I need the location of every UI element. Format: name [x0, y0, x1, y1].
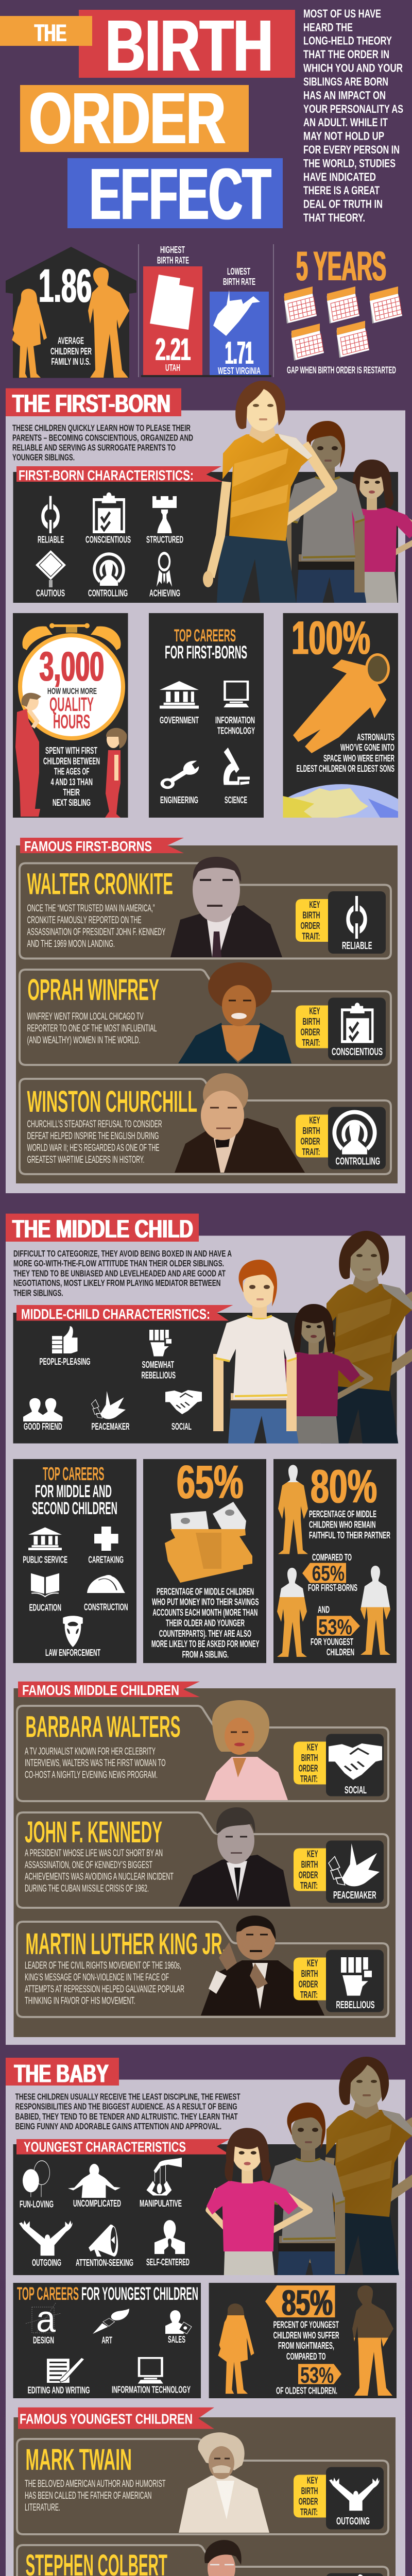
icon: government	[160, 681, 199, 725]
trait: rebellious: REBELLIOUS	[336, 1999, 375, 2011]
panel: middle-child characteristics	[13, 1305, 397, 1444]
icon: design: DESIGN	[33, 2335, 54, 2345]
panel: first-born characteristics	[13, 466, 398, 603]
stat: savings: ACCOUNTS EACH MONTH (MORE THAN	[152, 1607, 258, 1618]
icon: information technology: TECHNOLOGY	[217, 726, 255, 736]
icon: uncomplicated	[68, 2164, 121, 2209]
card: Winston Churchill: WORLD WAR II; HE’S REGARDED AS ONE OF THE	[27, 1143, 160, 1154]
trait: rebellious: ORDER	[299, 1979, 318, 1990]
icon: sales: SALES	[168, 2334, 185, 2345]
card: Oprah Winfrey: REPORTER TO ONE OF THE MOST INFLUENTIAL	[27, 1023, 157, 1034]
ribbon: famous middle children: FAMOUS MIDDLE CHILDREN	[22, 1682, 179, 1698]
card: Martin Luther King Jr.: THINKING IN FAVOR OF HIS MOVEMENT.	[25, 1996, 135, 2007]
stat: savings: MORE LIKELY TO BE ASKED FOR MONEY	[151, 1639, 260, 1649]
icon: manipulative	[140, 2158, 182, 2209]
card: Walter Cronkite: CRONKITE FAMOUSLY REPORTED ON THE	[27, 915, 141, 926]
trait: reliable: RELIABLE	[342, 940, 372, 952]
intro text: DEAL OF TRUTH IN	[303, 198, 383, 210]
trait: reliable	[296, 891, 386, 954]
trait: outgoing	[294, 2467, 384, 2530]
stat: savings: THEIR OLDER AND YOUNGER	[166, 1618, 245, 1628]
icon: sales	[165, 2310, 192, 2345]
trait: social	[294, 1734, 384, 1796]
trait: controlling: KEY	[309, 1115, 320, 1125]
icon: people-pleasing: PEOPLE-PLEASING	[39, 1357, 91, 1367]
illustration: three siblings	[215, 1231, 412, 1453]
title: The Birth Order Effect: ORDER	[29, 77, 226, 159]
text block: first-born description: YOUNGER SIBLINGS.	[12, 452, 75, 463]
stat: savings	[143, 1456, 266, 1663]
stat: quality hours: CHILDREN BETWEEN	[43, 756, 100, 767]
icon: construction: CONSTRUCTION	[84, 1602, 128, 1613]
icon: information technology: INFORMATION TECHNOLOGY	[112, 2385, 191, 2395]
panel: the first-born	[6, 381, 412, 1193]
icon: science	[224, 748, 250, 805]
badge: 53%: 53%	[318, 1615, 352, 1639]
icon: information technology	[215, 681, 255, 736]
icon: outgoing: OUTGOING	[32, 2258, 61, 2268]
stat: nightmares: COMPARED TO	[286, 2351, 326, 2362]
icon: somewhat rebellious: REBELLIOUS	[141, 1370, 176, 1381]
panel: top careers for youngest children	[13, 2283, 201, 2398]
icon: money stacks	[165, 1502, 252, 1583]
card: Martin Luther King Jr.: ATTEMPTS AT REPRESSION HELPED GALVANIZE POPULAR	[25, 1984, 184, 1995]
card: Winston Churchill	[20, 1073, 391, 1174]
trait: social: TRAIT:	[300, 1774, 318, 1784]
card: Mark Twain: LITERATURE.	[25, 2502, 60, 2513]
ribbon: youngest characteristics: YOUNGEST CHARACTERISTICS	[24, 2139, 186, 2155]
icon: manipulative: MANIPULATIVE	[140, 2198, 182, 2209]
stat: nightmares	[209, 2282, 397, 2398]
card: Martin Luther King Jr.	[17, 1916, 388, 2017]
card: Mark Twain: HAS BEEN CALLED THE FATHER OF AMERICAN	[25, 2490, 151, 2501]
icon: somewhat rebellious: SOMEWHAT	[142, 1360, 174, 1370]
text block: baby description	[15, 2091, 241, 2131]
card: Walter Cronkite: AND THE 1969 MOON LANDING.	[27, 939, 115, 950]
icon: achieving: ACHIEVING	[149, 588, 180, 598]
card: Barbara Walters	[17, 1700, 388, 1801]
stat: highest birth rate Utah: UTAH	[165, 363, 180, 373]
trait: reliable: TRAIT:	[302, 931, 320, 942]
panel: famous youngest children	[13, 2408, 396, 2576]
panel: the baby: FOR YOUNGEST CHILDREN	[81, 2284, 198, 2304]
stat: faithfulness: CHILDREN	[327, 1647, 354, 1657]
intro text: HAVE INDICATED	[303, 171, 376, 183]
icon: alarm clock	[20, 623, 123, 738]
icon: social	[165, 1390, 202, 1432]
stat: faithfulness: COMPARED TO	[312, 1552, 352, 1563]
portrait: Walter Cronkite	[170, 857, 282, 957]
icon: astronaut	[293, 653, 390, 753]
icon: construction	[84, 1575, 128, 1613]
card: John F. Kennedy: A PRESIDENT WHOSE LIFE WAS CUT SHORT BY AN	[25, 1848, 163, 1859]
panel: top careers for middle and second children: SECOND CHILDREN	[32, 1499, 117, 1518]
icon: fun-loving: FUN-LOVING	[20, 2199, 54, 2209]
stat: quality hours: HOW MUCH MORE	[47, 686, 97, 696]
stat: lowest birth rate West Virginia	[141, 266, 271, 377]
stat: astronauts	[283, 613, 398, 818]
stat: quality hours: NEXT SIBLING	[53, 798, 91, 808]
icon: information technology: INFORMATION	[215, 715, 255, 725]
icon: people-pleasing	[39, 1326, 91, 1367]
trait: social: ORDER	[299, 1763, 318, 1773]
card: Stephen Colbert	[17, 2540, 388, 2576]
panel: the baby	[6, 2057, 412, 2576]
figure: parent	[15, 693, 41, 817]
icon: cautious: CAUTIOUS	[36, 588, 65, 598]
ribbon: first-born characteristics: FIRST-BORN CHARACTERISTICS:	[19, 467, 194, 483]
card: Walter Cronkite: ASSASSINATION OF PRESIDENT JOHN F. KENNEDY	[27, 927, 166, 938]
title: The Birth Order Effect: BIRTH	[106, 5, 273, 86]
icon: fun-loving	[20, 2161, 54, 2209]
text block: first-born description: RELIABLE AND SERVING AS SURROGATE PARENTS TO	[12, 443, 176, 453]
icon: government: GOVERNMENT	[160, 715, 199, 725]
stat: quality hours: THE AGES OF	[54, 767, 90, 777]
stat: lowest birth rate West Virginia: BIRTH RATE	[223, 277, 255, 287]
panel: top careers for first-borns: TOP CAREERS	[174, 626, 236, 646]
icon: engineering: ENGINEERING	[160, 795, 198, 805]
portrait: Oprah Winfrey	[178, 962, 291, 1063]
intro text: THERE IS A GREAT	[303, 184, 380, 197]
icon: structured: STRUCTURED	[146, 535, 183, 545]
stat: quality hours: SPENT WITH FIRST	[45, 745, 97, 756]
panel: top careers for first-borns	[149, 613, 264, 818]
trait: reliable: ORDER	[301, 921, 320, 931]
text block: middle child description: NEGOTIATIONS, MOST LIKELY FROM PLAYING MEDIATOR BETWEEN	[13, 1278, 220, 1288]
stat: average children per family: FAMILY IN U.S.	[52, 357, 91, 367]
stat: quality hours: HOURS	[53, 711, 90, 733]
stat: lowest birth rate West Virginia: WEST VIRGINIA	[218, 366, 261, 376]
icon: uncomplicated: UNCOMPLICATED	[73, 2198, 121, 2209]
card: Mark Twain: MARK TWAIN	[26, 2443, 132, 2477]
intro text: HAS AN IMPACT ON	[303, 89, 386, 101]
trait: rebellious: TRAIT:	[300, 1990, 318, 2000]
heading: the first-born: THE FIRST-BORN	[12, 390, 170, 418]
portrait: Stephen Colbert	[176, 2540, 265, 2576]
card: Mark Twain	[17, 2432, 388, 2534]
ribbon: middle-child characteristics: MIDDLE-CHILD CHARACTERISTICS:	[21, 1306, 210, 1322]
panel: top careers for youngest children: TOP CAREERS	[17, 2284, 79, 2304]
icon: good friend: GOOD FRIEND	[24, 1421, 62, 1432]
title: The Birth Order Effect: EFFECT	[90, 153, 271, 234]
intro text: MOST OF US HAVE	[303, 7, 381, 20]
card: Winston Churchill: DEFEAT HELPED INSPIRE THE ENGLISH DURING	[27, 1131, 159, 1142]
icon: peacemaker: PEACEMAKER	[92, 1421, 130, 1432]
text block: baby description: BABIED, THEY TEND TO BE TENDER AND ALTRUISTIC. THEY LEARN THAT	[15, 2111, 238, 2122]
card: Martin Luther King Jr.: MARTIN LUTHER KING JR.	[26, 1927, 227, 1961]
icon: controlling	[88, 554, 128, 598]
card: Winston Churchill: CHURCHILL’S STEADFAST REFUSAL TO CONSIDER	[27, 1119, 162, 1130]
icon: law enforcement	[45, 1616, 100, 1658]
icon: conscientious	[85, 493, 131, 545]
illustration: earth	[283, 784, 398, 818]
card: Martin Luther King Jr.: KING’S MESSAGE OF NON-VIOLENCE IN THE FACE OF	[25, 1972, 169, 1983]
intro text: HEARD THE	[303, 21, 353, 33]
panel: top careers for first-borns: FOR FIRST-BORNS	[165, 642, 247, 663]
trait: controlling: TRAIT:	[302, 1147, 320, 1157]
text block: baby description: THESE CHILDREN USUALLY RECEIVE THE LEAST DISCIPLINE, THE FEWEST	[15, 2091, 241, 2102]
card: Walter Cronkite: WALTER CRONKITE	[27, 867, 173, 901]
stat: savings: WHO PUT MONEY INTO THEIR SAVINGS	[152, 1597, 259, 1607]
icon: self-centered	[146, 2220, 190, 2267]
icon: good friend	[23, 1398, 63, 1432]
trait: controlling	[296, 1107, 386, 1170]
panel: famous first-borns	[16, 838, 398, 1183]
trait: social: BIRTH	[301, 1753, 318, 1763]
stat: quality hours: QUALITY	[49, 694, 94, 716]
stat: average children per family	[6, 247, 136, 378]
panel: youngest characteristics	[13, 2139, 398, 2275]
icon: caretaking	[88, 1527, 124, 1565]
icon: caretaking: CARETAKING	[88, 1555, 124, 1565]
icon: design	[26, 2299, 61, 2345]
stat: faithfulness: 80%	[311, 1460, 377, 1513]
trait: peacemaker: PEACEMAKER	[333, 1890, 376, 1901]
trait: social: SOCIAL	[345, 1785, 367, 1796]
trait: conscientious	[296, 997, 386, 1060]
stat: faithfulness: FOR FIRST-BORNS	[308, 1583, 357, 1593]
icon: education: EDUCATION	[29, 1603, 61, 1613]
trait: outgoing: OUTGOING	[336, 2516, 370, 2527]
trait: outgoing: KEY	[307, 2475, 318, 2485]
trait: controlling: BIRTH	[303, 1126, 320, 1136]
icon: science: SCIENCE	[225, 795, 247, 805]
card: Barbara Walters: A TV JOURNALIST KNOWN FOR HER CELEBRITY	[25, 1746, 156, 1757]
stat: quality hours	[13, 613, 128, 818]
intro text	[303, 7, 403, 224]
text block: middle child description: MORE GO-WITH-THE-FLOW ATTITUDE THAN THEIR OLDER SIBLINGS.	[13, 1258, 224, 1268]
text block: middle child description: THEIR SIBLINGS.	[13, 1288, 63, 1298]
icon: reliable	[38, 496, 64, 545]
stat: nightmares: OF OLDEST CHILDREN.	[276, 2385, 337, 2396]
intro text: AN ADULT. WHILE IT	[303, 116, 388, 129]
icon: peacemaker	[92, 1391, 130, 1432]
text block: first-born description: THESE CHILDREN QUICKLY LEARN HOW TO PLEASE THEIR	[12, 422, 191, 433]
trait: conscientious: BIRTH	[303, 1016, 320, 1027]
trait: controlling: ORDER	[301, 1137, 320, 1147]
trait: attention-seeking	[294, 2573, 384, 2576]
card: Barbara Walters: BARBARA WALTERS	[26, 1710, 180, 1744]
stat: average children per family: 1.86	[39, 260, 92, 312]
trait: peacemaker: KEY	[307, 1849, 318, 1859]
icon: cautious	[36, 550, 66, 598]
text block: middle child description	[13, 1248, 232, 1298]
stat: lowest birth rate West Virginia: 1.71	[225, 335, 253, 371]
panel: the middle child	[6, 1214, 412, 2045]
card: Oprah Winfrey	[20, 962, 391, 1065]
icon: editing and writing	[28, 2358, 90, 2395]
trait: peacemaker	[294, 1840, 384, 1903]
icon: structured	[146, 496, 183, 545]
text block: baby description: RESPONSIBILITIES AND THE BIGGEST AUDIENCE. AS A RESULT OF BEING	[15, 2102, 237, 2112]
trait: reliable: KEY	[309, 900, 320, 910]
heading: the middle child: THE MIDDLE CHILD	[12, 1215, 193, 1243]
stat: savings: COUNTERPARTS). THEY ARE ALSO	[159, 1629, 251, 1639]
card: Winston Churchill: WINSTON CHURCHILL	[27, 1085, 197, 1118]
card: John F. Kennedy	[17, 1807, 388, 1908]
card: Martin Luther King Jr.: LEADER OF THE CIVIL RIGHTS MOVEMENT OF THE 1960s,	[25, 1960, 181, 1971]
text block: first-born description	[12, 422, 193, 463]
icon: information technology	[112, 2357, 191, 2395]
trait: outgoing: BIRTH	[301, 2486, 318, 2496]
ribbon: famous first-borns: FAMOUS FIRST-BORNS	[24, 838, 152, 854]
stat: nightmares: PERCENT OF YOUNGEST	[273, 2319, 339, 2330]
portrait: Mark Twain	[179, 2432, 269, 2533]
card: Barbara Walters: CO-HOST A NIGHTLY EVENING NEWS PROGRAM.	[25, 1770, 158, 1781]
card: Oprah Winfrey: (AND WEALTHY) WOMEN IN THE WORLD.	[27, 1035, 140, 1046]
stat: quality hours: THEIR	[63, 787, 80, 798]
stat: highest birth rate Utah: HIGHEST	[160, 245, 185, 255]
card: John F. Kennedy: ACHIEVEMENTS WAS AVOIDING A NUCLEAR INCIDENT	[25, 1872, 174, 1883]
trait: conscientious: ORDER	[301, 1027, 320, 1038]
stat: savings: FROM A SIBLING.	[182, 1650, 229, 1660]
icon: public service	[23, 1527, 67, 1565]
badge: 85%	[265, 2282, 335, 2323]
icon: social: SOCIAL	[171, 1421, 192, 1432]
icon: somewhat rebellious	[141, 1330, 176, 1381]
icon: education	[29, 1573, 61, 1613]
icon: achieving	[149, 552, 180, 598]
stat: savings: PERCENTAGE OF MIDDLE CHILDREN	[157, 1586, 254, 1597]
stat: highest birth rate Utah: 2.21	[156, 332, 191, 367]
portrait: Winston Churchill	[175, 1073, 305, 1173]
card: John F. Kennedy: DURING THE CUBAN MISSILE CRISIS OF 1962.	[25, 1884, 149, 1894]
icon: engineering	[160, 761, 199, 805]
trait: rebellious	[294, 1950, 384, 2012]
intro text: MAY NOT HOLD UP	[303, 130, 384, 142]
badge: 53%: 53%	[300, 2363, 334, 2388]
trait: outgoing: ORDER	[299, 2497, 318, 2507]
stat: savings: 65%	[177, 1456, 243, 1509]
card: Winston Churchill: GREATEST WARTIME LEADERS IN HISTORY.	[27, 1155, 144, 1165]
portrait: Martin Luther King Jr.	[201, 1916, 324, 2015]
stat: highest birth rate Utah	[143, 245, 202, 375]
icon: design: a	[36, 2299, 56, 2340]
trait: reliable: BIRTH	[303, 910, 320, 921]
stat: average children per family: AVERAGE	[58, 335, 84, 346]
trait: rebellious: KEY	[307, 1958, 318, 1968]
icon: attention-seeking	[76, 2225, 133, 2268]
stat: faithfulness	[273, 1459, 397, 1663]
icon: law enforcement: LAW ENFORCEMENT	[45, 1648, 100, 1658]
icon: editing and writing: EDITING AND WRITING	[28, 2385, 90, 2395]
icon: reliable: RELIABLE	[38, 535, 64, 545]
stat: five year gap	[284, 243, 402, 375]
title: The Birth Order Effect: THE	[35, 19, 66, 46]
trait: conscientious: TRAIT:	[302, 1038, 320, 1048]
icon: self-centered: SELF-CENTERED	[146, 2257, 190, 2267]
panel: top careers for middle and second children: FOR MIDDLE AND	[35, 1482, 112, 1501]
trait: controlling: CONTROLLING	[336, 1156, 380, 1167]
stat: astronauts: 100%	[291, 612, 370, 664]
card: Oprah Winfrey: WINFREY WENT FROM LOCAL CHICAGO TV	[27, 1011, 144, 1022]
heading: the baby: THE BABY	[14, 2060, 109, 2088]
badge: 85%: 85%	[282, 2282, 333, 2323]
trait: conscientious: KEY	[309, 1006, 320, 1016]
icon: controlling: CONTROLLING	[88, 588, 128, 598]
icon: art: ART	[101, 2335, 112, 2345]
badge: 65%: 65%	[312, 1561, 345, 1585]
stat: nightmares: CHILDREN WHO SUFFER	[273, 2330, 339, 2341]
card: John F. Kennedy: JOHN F. KENNEDY	[25, 1816, 162, 1849]
illustration: three siblings	[203, 381, 412, 605]
icon: art	[93, 2309, 129, 2345]
text block: baby description: BEING FUNNY AND ADORABLE GAINS ATTENTION AND APPROVAL.	[15, 2121, 221, 2131]
stat: quality hours: 3,000	[39, 643, 104, 690]
icon: outgoing	[19, 2221, 73, 2268]
portrait: John F. Kennedy	[179, 1807, 290, 1907]
stat: quality hours: 4 AND 13 THAN	[50, 777, 93, 787]
illustration: three siblings	[207, 2057, 412, 2289]
icon: public service: PUBLIC SERVICE	[23, 1555, 67, 1565]
card: Walter Cronkite	[20, 857, 391, 958]
stat: nightmares: FROM NIGHTMARES,	[278, 2341, 334, 2351]
title: The Birth Order Effect	[0, 5, 295, 234]
stat: faithfulness: AND	[318, 1605, 330, 1615]
trait: outgoing: TRAIT:	[300, 2507, 318, 2517]
trait: social: KEY	[307, 1742, 318, 1753]
card: Oprah Winfrey: OPRAH WINFREY	[28, 973, 159, 1007]
ribbon: famous youngest children	[18, 2408, 214, 2429]
text block: first-born description: PARENTS – BECOMING CONSCIENTIOUS, ORGANIZED AND	[12, 432, 193, 443]
panel: top careers for middle and second children: TOP CAREERS	[43, 1463, 104, 1484]
stat: lowest birth rate West Virginia: LOWEST	[227, 266, 250, 277]
icon: conscientious: CONSCIENTIOUS	[85, 535, 131, 545]
intro text: THAT THEORY.	[303, 211, 365, 224]
card: John F. Kennedy: ASSASSINATION, ONE OF KENNEDY’S BIGGEST	[25, 1860, 152, 1871]
panel: famous middle children	[13, 1682, 396, 2037]
card: Mark Twain: THE BELOVED AMERICAN AUTHOR AND HUMORIST	[25, 2479, 166, 2489]
badge: 65%	[302, 1561, 346, 1585]
stat: average children per family: CHILDREN PER	[50, 346, 92, 357]
portrait: Barbara Walters	[205, 1700, 288, 1800]
ribbon: famous youngest children: FAMOUS YOUNGEST CHILDREN	[20, 2411, 193, 2427]
icon: attention-seeking: ATTENTION-SEEKING	[76, 2258, 133, 2268]
trait: rebellious: BIRTH	[301, 1969, 318, 1979]
text block: middle child description: THEY TEND TO BE UNBIASED AND LEVELHEADED AND ARE GOOD AT	[13, 1268, 226, 1278]
figure: child	[105, 728, 127, 818]
stat: faithfulness: FOR YOUNGEST	[311, 1637, 353, 1647]
trait: peacemaker: ORDER	[299, 1870, 318, 1880]
panel: top careers for middle and second children	[13, 1459, 136, 1663]
trait: peacemaker: TRAIT:	[300, 1880, 318, 1891]
card: Walter Cronkite: ONCE THE “MOST TRUSTED MAN IN AMERICA,”	[27, 903, 154, 914]
text block: middle child description: DIFFICULT TO CATEGORIZE, THEY AVOID BEING BOXED IN AND HAVE A	[13, 1248, 232, 1259]
card: Barbara Walters: INTERVIEWS, WALTERS WAS THE FIRST WOMAN TO	[25, 1758, 166, 1769]
stat: highest birth rate Utah: BIRTH RATE	[157, 256, 189, 266]
trait: peacemaker: BIRTH	[301, 1859, 318, 1870]
